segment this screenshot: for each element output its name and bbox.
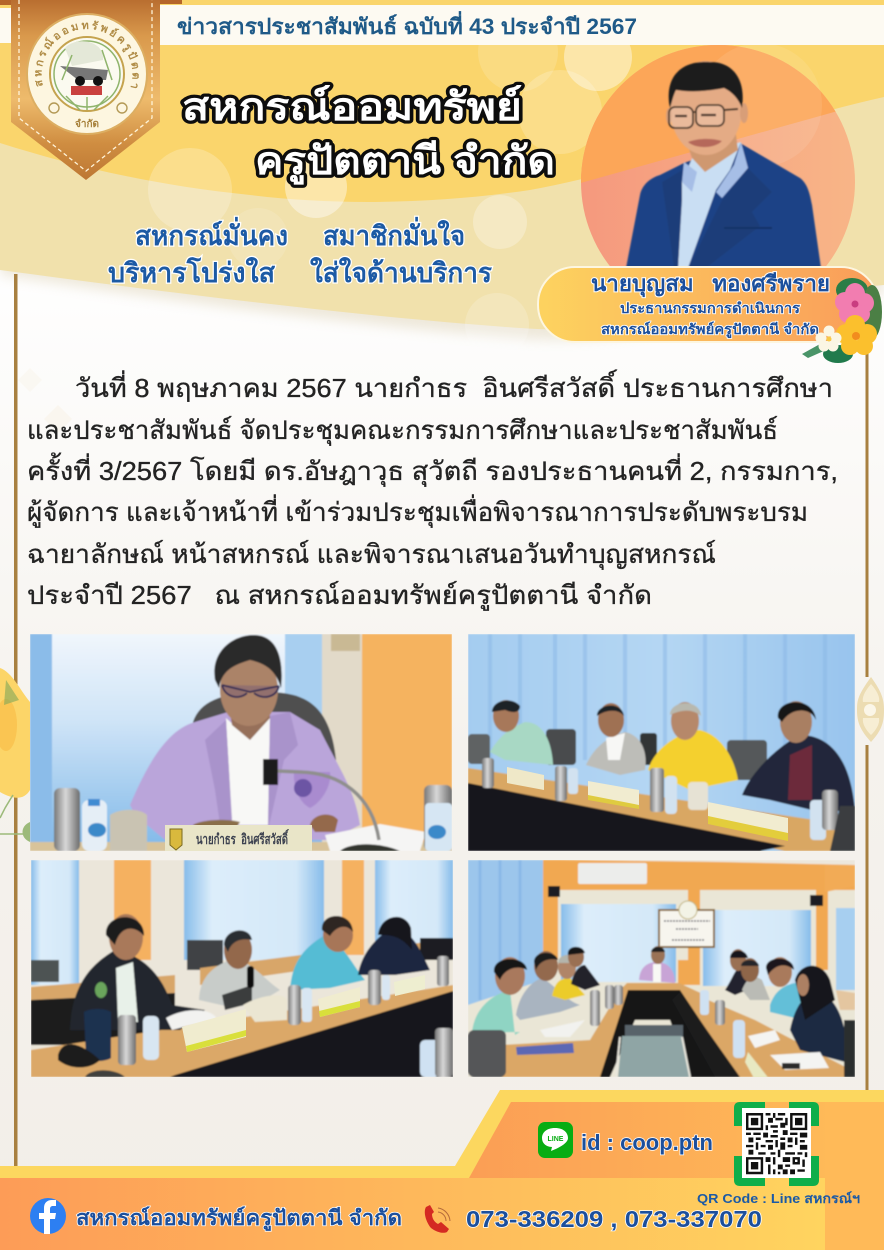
footer: bands	[0, 1090, 884, 1250]
air conditioner	[578, 863, 647, 884]
person 4	[742, 735, 855, 812]
issue title: ข่าวสารประชาสัมพันธ์ ฉบับที่ 43 ประจำปี 2567	[177, 10, 637, 39]
person head of table	[639, 962, 675, 983]
top strips	[0, 5, 884, 45]
main heading	[182, 84, 555, 185]
article text: วันที่ 8 พฤษภาคม 2567 นายกำธร อินศรีสวัสดิ์ ประธานการศึกษา	[75, 369, 833, 403]
tagline	[108, 216, 492, 288]
name plate: นายกำธร อินศรีสวัสดิ์	[196, 828, 289, 847]
chairman title: ประธานกรรมการดำเนินการ	[620, 300, 800, 316]
photo: committee members at table	[468, 634, 855, 851]
person 1	[490, 722, 553, 765]
logo	[26, 13, 148, 135]
photo: committee members side view	[31, 860, 453, 1077]
QR caption: QR Code : Line สหกรณ์ฯ	[697, 1191, 860, 1206]
ribbon with logo	[0, 0, 182, 180]
right side people	[724, 969, 748, 996]
tagline: ใส่ใจด้านบริการ	[310, 257, 492, 288]
article text: ประจำปี 2567 ณ สหกรณ์ออมทรัพย์ครูปัตตานี จำกัด	[27, 580, 652, 611]
name plate	[538, 267, 878, 342]
chairman photo	[626, 61, 821, 268]
photo: chair reading at desk	[30, 634, 452, 851]
chairman title: สหกรณ์ออมทรัพย์ครูปัตตานี จำกัด	[601, 321, 819, 338]
article text: และประชาสัมพันธ์ จัดประชุมคณะกรรมการศึกษาและประชาสัมพันธ์	[27, 415, 778, 446]
person 1	[70, 950, 205, 1030]
meeting sign board	[659, 901, 714, 947]
chairman title	[601, 300, 819, 338]
person 2	[586, 732, 646, 775]
centre table	[599, 989, 716, 1077]
portrait circle	[581, 45, 855, 266]
header background waves	[0, 0, 884, 357]
icon: tropical flowers	[802, 278, 882, 363]
icon: LINE: LINE	[548, 1136, 564, 1143]
icon: Facebook	[30, 1198, 66, 1234]
person 4	[357, 934, 430, 976]
icon: phone	[425, 1205, 450, 1233]
QR code	[734, 1102, 819, 1186]
frame lines and side ornaments	[0, 274, 884, 1167]
tagline: สหกรณ์มั่นคง	[135, 216, 288, 251]
chairman name: นายบุญสม ทองศรีพราย	[591, 271, 830, 298]
LINE id: id : coop.ptn	[581, 1130, 713, 1155]
icon: LINE	[538, 1122, 573, 1158]
tagline: บริหารโปร่งใส	[108, 256, 276, 288]
facebook page name: สหกรณ์ออมทรัพย์ครูปัตตานี จำกัด	[76, 1206, 402, 1232]
article text: ผู้จัดการ และเจ้าหน้าที่ เข้าร่วมประชุมเพื่อพิจารณาการประดับพระบรม	[27, 494, 808, 528]
article text: ครั้งที่ 3/2567 โดยมี ดร.อัษฎาวุธ สุวัตถี รองประธานคนที่ 2, กรรมการ,	[27, 452, 838, 487]
person 3	[290, 935, 365, 990]
name plates	[182, 975, 425, 1052]
main heading: สหกรณ์ออมทรัพย์	[182, 84, 522, 129]
logo: จำกัด	[75, 118, 99, 130]
name plate	[165, 825, 312, 851]
person 3	[648, 730, 738, 790]
name plates	[507, 767, 788, 841]
article text	[27, 369, 838, 611]
tagline: สมาชิกมั่นใจ	[323, 216, 465, 251]
left side people	[470, 990, 520, 1035]
phone numbers: 073-336209 , 073-337070	[466, 1206, 762, 1232]
article text: ฉายาลักษณ์ หน้าสหกรณ์ และพิจารณาเสนอวันทำบุญสหกรณ์	[27, 539, 716, 570]
photo: meeting room overview	[468, 860, 855, 1080]
main heading: ครูปัตตานี จำกัด	[255, 140, 555, 185]
person 2	[199, 958, 280, 1007]
